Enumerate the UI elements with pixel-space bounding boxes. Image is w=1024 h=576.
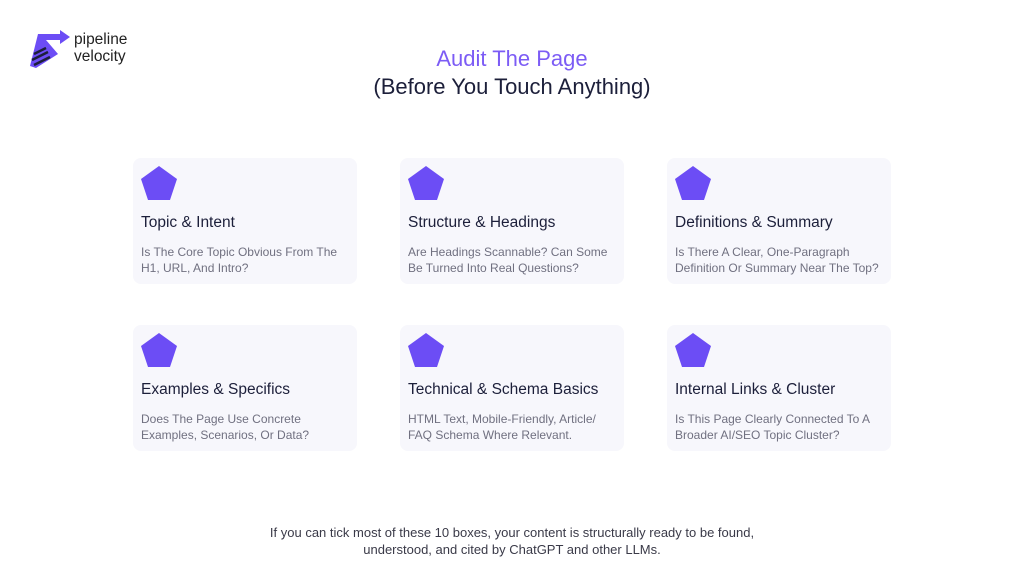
card: technical bbox=[400, 325, 624, 451]
logo: pipeline bbox=[74, 31, 127, 48]
card: examples bbox=[133, 325, 357, 451]
logo bbox=[30, 30, 127, 68]
card: structure bbox=[400, 158, 624, 284]
card: topic & intent: Is The Core Topic Obvious From The H1, URL, And Intro? bbox=[141, 245, 337, 274]
logo: velocity bbox=[74, 48, 126, 65]
card: examples: Examples & Specifics bbox=[141, 381, 290, 398]
card: internal links: Is This Page Clearly Connected To A Broader AI/SEO Topic Cluster? bbox=[675, 412, 869, 442]
card: internal links bbox=[667, 325, 891, 451]
title: Audit The Page bbox=[436, 46, 588, 71]
card: technical: Technical & Schema Basics bbox=[408, 381, 598, 398]
card: examples: Does The Page Use Concrete Examples, Scenarios, Or Data? bbox=[141, 412, 309, 442]
footer text bbox=[270, 525, 754, 557]
card: structure: Structure & Headings bbox=[408, 214, 555, 231]
footer text: understood, and cited by ChatGPT and other LLMs. bbox=[363, 542, 661, 557]
card: structure: Are Headings Scannable? Can Some Be Turned Into Real Questions? bbox=[408, 245, 607, 274]
card: topic & intent bbox=[133, 158, 357, 284]
title bbox=[373, 46, 651, 99]
footer text: If you can tick most of these 10 boxes, your content is structurally ready to be found, bbox=[270, 525, 754, 540]
card: technical: HTML Text, Mobile-Friendly, Article/ FAQ Schema Where Relevant. bbox=[408, 412, 596, 442]
card: topic & intent: Topic & Intent bbox=[141, 214, 235, 231]
title: (Before You Touch Anything) bbox=[373, 74, 651, 99]
card: definitions: Definitions & Summary bbox=[675, 214, 833, 231]
card: internal links: Internal Links & Cluster bbox=[675, 381, 835, 398]
card: definitions: Is There A Clear, One-Paragraph Definition Or Summary Near The Top? bbox=[675, 245, 879, 274]
card: definitions bbox=[667, 158, 891, 284]
